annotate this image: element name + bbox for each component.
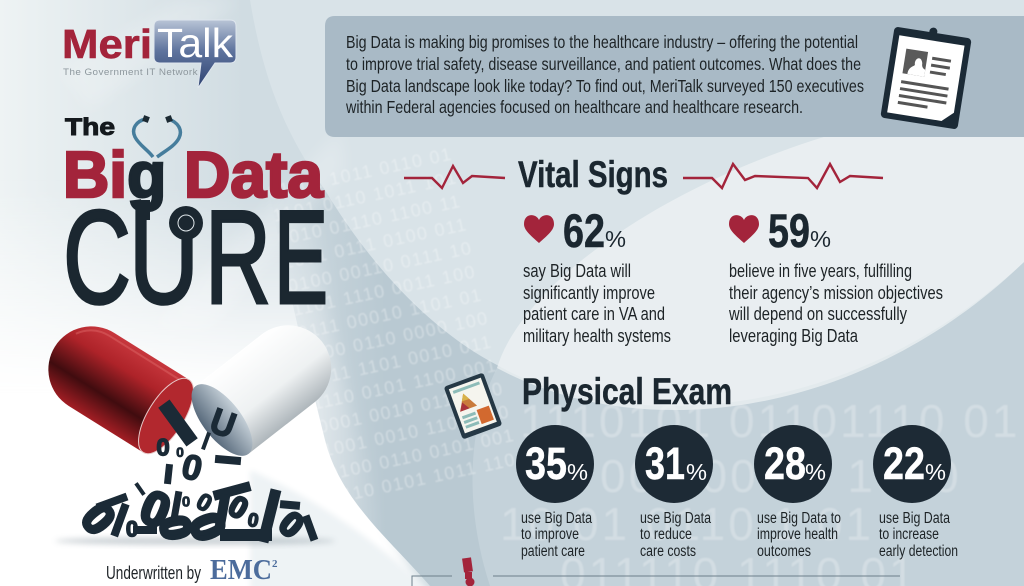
intro text: within Federal agencies focused on healthcare and healthcare research.: [345, 97, 803, 117]
title: The Big Data Cure: C: [63, 184, 131, 332]
pile of digits: 0: [182, 494, 190, 510]
stat circle: 28%: improve health: [757, 526, 838, 543]
pile of digits: 0: [151, 513, 199, 543]
icon: stethoscope chest piece: [136, 200, 203, 240]
binary digits: 01101 1011 0110 01: [266, 144, 454, 202]
stat circle: 22%: to increase: [879, 526, 939, 543]
falling digits: U: [205, 400, 241, 446]
title: The Big Data Cure: E: [274, 184, 328, 332]
stat: 62%: say Big Data will: [523, 261, 631, 281]
title: The Big Data Cure: U: [129, 184, 199, 332]
bottom panel edge with microscope: [412, 557, 900, 586]
logo: MeriTalk: Talk: [157, 20, 234, 66]
icon: heart: [729, 215, 759, 243]
panel: introduction: [325, 16, 1024, 137]
stat: 62%: %: [605, 226, 626, 252]
binary digits: 0100 00110 0111 10: [286, 238, 474, 296]
intro text: Big Data is making big promises to the healthcare industry – offering the potential: [346, 32, 858, 52]
stat circle: 22%: %: [925, 459, 946, 485]
section: vital signs: [404, 154, 943, 346]
illustration: open capsule with binary digits: [32, 308, 349, 547]
icon: clipboard: [880, 22, 972, 130]
sponsor line: EMC: [210, 554, 272, 586]
icon: heartbeat line left: [404, 166, 505, 188]
stat circle: 35%: use Big Data: [521, 510, 592, 527]
white capsule half: [181, 308, 349, 466]
stat: 59%: [728, 204, 943, 346]
stat: 62%: 62: [563, 204, 605, 257]
icon: stethoscope tubes: [134, 115, 180, 157]
icon: tablet: [444, 373, 502, 439]
heading: Vital Signs: [518, 154, 668, 195]
binary digits: 0100 0110 0101 001: [326, 425, 517, 484]
speech bubble: [154, 20, 236, 88]
stat circle: 31%: use Big Data: [640, 510, 711, 527]
falling digits: 0: [178, 447, 206, 489]
binary digits: 0111 00010 1101 01: [296, 285, 484, 343]
icon: heartbeat line right: [683, 164, 883, 188]
red capsule half: [32, 310, 204, 462]
falling digits: 0: [156, 434, 170, 462]
sponsor line: Underwritten by: [106, 563, 201, 583]
binary digits: 1001 0111 0100 011: [281, 214, 469, 273]
title: The Big Data Cure: [63, 114, 328, 332]
intro text: Big Data landscape look like today? To find out, MeriTalk surveyed 150 executives: [346, 76, 864, 96]
stat: 59%: %: [810, 226, 831, 252]
binary digits: 10 01 0110 1 01: [500, 498, 874, 550]
falling digits: 0: [176, 444, 184, 460]
floor shadow: [55, 537, 335, 545]
stat circle: 28%: 28: [764, 438, 806, 489]
binary digits: 00 100 00 1000: [600, 450, 962, 502]
binary digits: 1011 1101 0010 011: [306, 331, 494, 390]
stat circle: 22%: [873, 425, 958, 560]
stat circle: 35%: [516, 425, 594, 560]
stat: 59%: 59: [768, 204, 810, 257]
stat circle: 28%: use Big Data to: [757, 510, 841, 527]
stat: 62%: significantly improve: [523, 283, 655, 303]
stat circle: 35%: 35: [525, 438, 567, 489]
stat circle: 31%: to reduce: [640, 526, 692, 543]
title: The Big Data Cure: R: [205, 184, 271, 332]
stat circle: 31%: [635, 425, 713, 560]
stat circle: 28%: [754, 425, 841, 560]
section: physical exam: [444, 371, 958, 560]
binary digits: 1110 0101 1100 001: [311, 355, 499, 414]
pile of digits: 0: [71, 494, 125, 544]
stat circle: 35%: %: [567, 459, 588, 485]
intro text: [345, 32, 864, 117]
stat: 59%: believe in five years, fulfilling: [729, 261, 912, 281]
stat circle: 35%: patient care: [521, 543, 585, 560]
stat: 62%: patient care in VA and: [523, 304, 665, 324]
pile of digits: 0: [223, 490, 253, 526]
stat circle: 22%: 22: [883, 438, 925, 489]
intro text: to improve trial safety, disease surveillance, and patient outcomes. What does the: [346, 54, 861, 74]
icon: microscope: [462, 557, 474, 586]
binary digits: 1100 0110 0000 100: [301, 308, 490, 367]
stat: 62%: military health systems: [523, 326, 671, 346]
pile of digits: 0: [180, 507, 234, 547]
stat circle: 28%: %: [805, 459, 826, 485]
binary digits: 1110 0101 1011 110: [331, 449, 518, 508]
icon: heart: [524, 215, 554, 243]
title: The Big Data Cure: Big Data: [63, 138, 324, 211]
binary digits: 1110101 01101110 01: [520, 395, 1020, 447]
stat circle: 31%: 31: [645, 438, 685, 489]
stat circle: 28%: outcomes: [757, 543, 811, 560]
stat: 59%: leveraging Big Data: [729, 326, 859, 346]
sponsor line: 2: [272, 558, 278, 570]
stat circle: 22%: early detection: [879, 543, 958, 560]
title: The Big Data Cure: The: [65, 114, 115, 141]
stat: 62%: [523, 204, 671, 346]
logo: MeriTalk: [62, 20, 236, 88]
binary digits: 0010 01110 1100 11: [276, 191, 463, 249]
logo: MeriTalk: The Government IT Network: [63, 67, 198, 77]
pile of digits: 0: [191, 488, 217, 518]
binary digits: 1001 0010 1101 100: [321, 401, 512, 461]
stat circle: 22%: use Big Data: [879, 510, 950, 527]
falling digits: [134, 399, 241, 496]
stat circle: 35%: to improve: [521, 526, 579, 543]
pile of digits: 0: [126, 516, 138, 542]
binary digits: 0001 0010 0111 010: [316, 378, 505, 437]
logo: MeriTalk: Meri: [62, 21, 152, 67]
stat circle: 31%: care costs: [640, 543, 696, 560]
pile of digits: 0: [272, 504, 310, 546]
pile of digits: 0: [246, 510, 260, 532]
stat circle: 31%: %: [686, 459, 707, 485]
sponsor line: [106, 554, 278, 586]
binary digits: [266, 143, 1020, 586]
binary digits: 1101 1110 0011 100: [291, 261, 478, 320]
pile of digits: 0: [133, 480, 177, 540]
stat: 59%: will depend on successfully: [728, 304, 907, 324]
stat: 59%: their agency’s mission objectives: [729, 283, 943, 303]
pile of digits: [71, 480, 318, 547]
heading: Physical Exam: [522, 371, 732, 412]
binary digits: 1101 0110 1011 101: [271, 167, 459, 226]
